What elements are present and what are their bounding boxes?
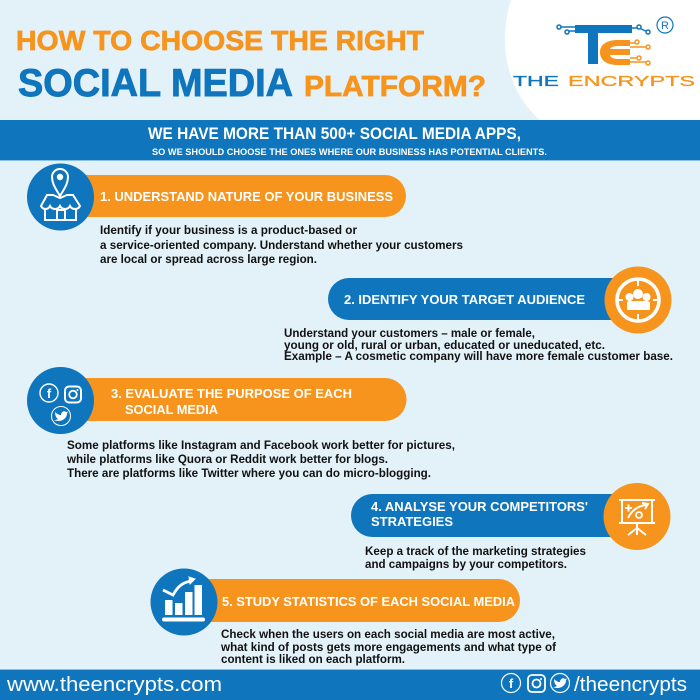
step 4 text	[365, 546, 586, 571]
step 3 text	[66, 440, 455, 480]
intro banner: WE HAVE MORE THAN 500+ SOCIAL MEDIA APPS,	[148, 124, 521, 143]
step 3 heading bar: SOCIAL MEDIA	[125, 402, 219, 417]
social handle: /theencrypts	[574, 674, 687, 696]
logo mark: T	[557, 25, 650, 64]
step 1	[27, 164, 463, 266]
title: PLATFORM?	[304, 71, 486, 103]
intro banner	[0, 120, 700, 161]
icon: audience target	[604, 266, 672, 334]
step 5 text: content is liked on each platform.	[221, 654, 405, 666]
step 2 heading bar: 2. IDENTIFY YOUR TARGET AUDIENCE	[344, 292, 585, 307]
step 4 heading bar: 4. ANALYSE YOUR COMPETITORS'	[371, 499, 588, 514]
step 5 heading bar	[184, 579, 520, 622]
intro banner: SO WE SHOULD CHOOSE THE ONES WHERE OUR BUSINESS HAS POTENTIAL CLIENTS.	[152, 147, 547, 158]
step 2 text: young or old, rural or urban, educated or uneducated, etc.	[284, 340, 605, 352]
step 4 heading bar: STRATEGIES	[371, 514, 453, 529]
icon: social networks: f	[47, 386, 52, 401]
title: HOW TO CHOOSE THE RIGHT	[16, 25, 424, 56]
step 4 heading bar	[351, 494, 637, 537]
step 2 text: Example – A cosmetic company will have more female customer base.	[284, 351, 673, 363]
icon: social networks	[27, 367, 94, 434]
step 1 heading bar: 1. UNDERSTAND NATURE OF YOUR BUSINESS	[100, 189, 393, 204]
website url: www.theencrypts.com	[6, 674, 222, 696]
step 2 heading bar	[328, 278, 638, 320]
step 5 text	[220, 629, 556, 666]
step 5 text: Check when the users on each social media are most active,	[221, 629, 555, 641]
icon: strategy board	[604, 483, 670, 550]
step 1 text: Identify if your business is a product-based or	[100, 225, 358, 237]
step 3 text: There are platforms like Twitter where you can do micro-blogging.	[67, 468, 431, 480]
step 1 text	[100, 225, 463, 266]
step 3 heading bar: 3. EVALUATE THE PURPOSE OF EACH	[111, 386, 352, 401]
step 1 heading bar	[60, 175, 406, 217]
step 3	[27, 367, 455, 480]
step 4	[351, 483, 670, 571]
registered mark: R	[661, 20, 669, 32]
footer social icons: f	[509, 676, 514, 691]
step 5	[150, 568, 556, 666]
step 5 text: what kind of posts gets more engagements and what type of	[220, 642, 556, 654]
title	[16, 25, 486, 105]
logo wordmark: THE	[513, 73, 559, 90]
footer	[0, 669, 700, 700]
logo wordmark: ENCRYPTS	[568, 73, 695, 90]
registered mark	[657, 17, 673, 33]
logo background blob	[505, 0, 700, 120]
step 5 heading bar: 5. STUDY STATISTICS OF EACH SOCIAL MEDIA	[222, 594, 516, 609]
logo wordmark	[513, 73, 695, 90]
title: SOCIAL MEDIA	[18, 62, 293, 105]
step 1 text: are local or spread across large region.	[100, 254, 317, 266]
step 3 heading bar	[60, 378, 406, 421]
logo	[513, 17, 695, 90]
step 2 text: Understand your customers – male or female,	[284, 328, 535, 340]
step 4 text: and campaigns by your competitors.	[365, 559, 567, 571]
step 3 text: while platforms like Quora or Reddit work better for blogs.	[66, 454, 388, 466]
icon: growth chart	[150, 568, 218, 636]
step 1 text: a service-oriented company. Understand whether your customers	[100, 240, 463, 252]
step 4 text: Keep a track of the marketing strategies	[365, 546, 586, 558]
footer social icons	[502, 674, 570, 692]
icon: map pin and store	[27, 164, 94, 230]
logo mark: E	[600, 40, 650, 65]
step 2 text	[284, 328, 673, 363]
step 3 text: Some platforms like Instagram and Facebook work better for pictures,	[67, 440, 455, 452]
step 2	[284, 266, 673, 363]
